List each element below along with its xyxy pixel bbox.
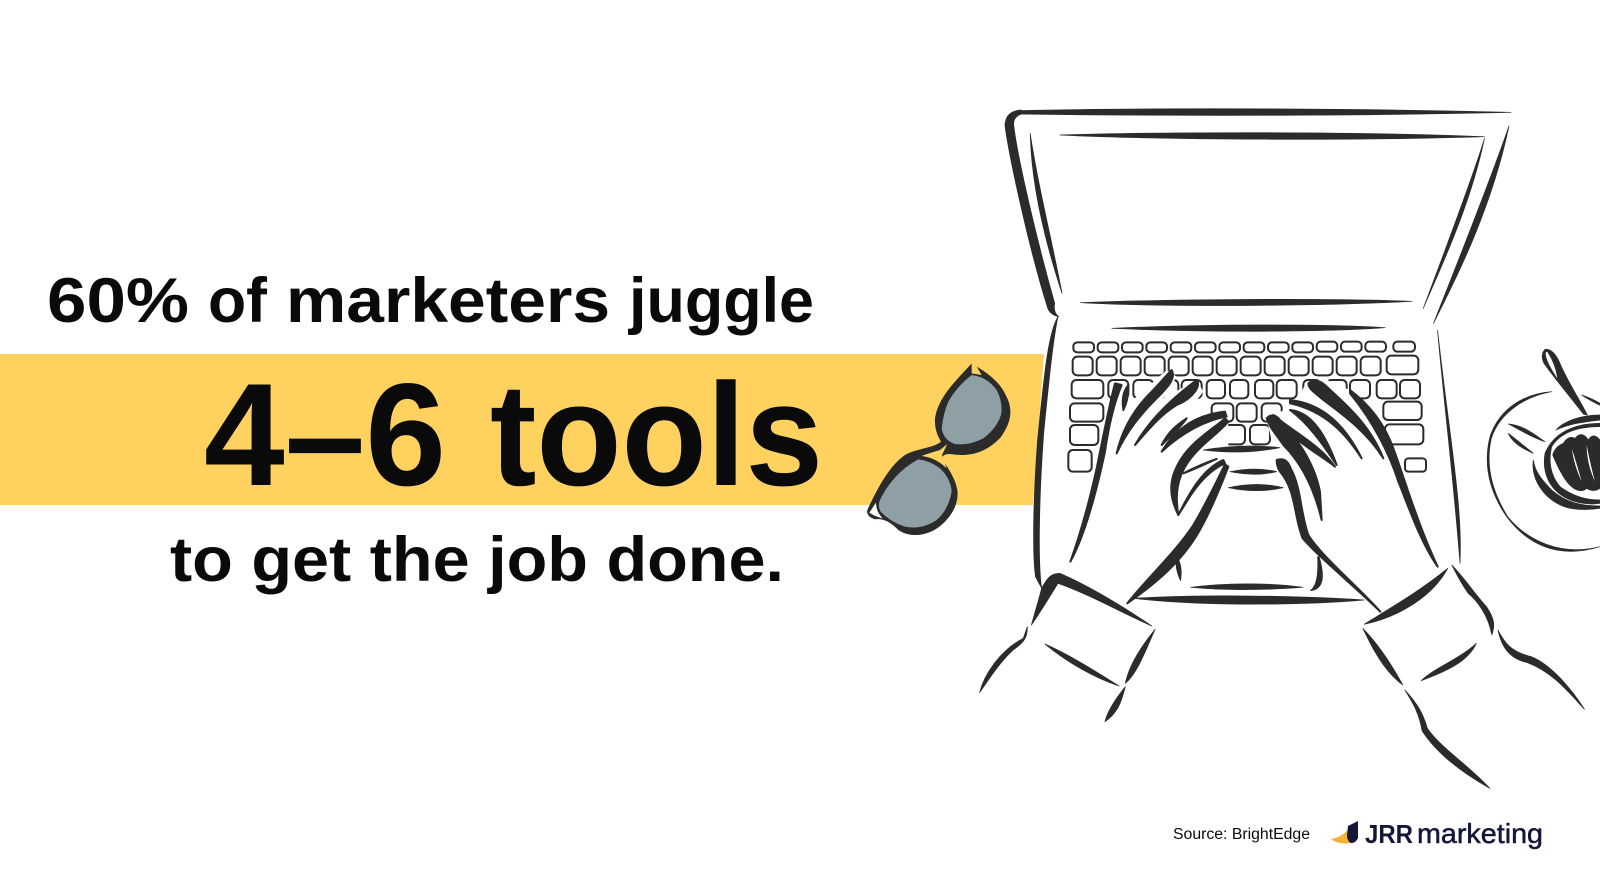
heading line 1 (47, 266, 814, 336)
big stat: 4-6 tools: tools (490, 353, 823, 516)
source note: Source: BrightEdge (1173, 826, 1310, 843)
right hand (1267, 381, 1438, 612)
logo: JRR marketing: marketing (1417, 818, 1543, 849)
heading line 1: of (208, 266, 268, 336)
logo wordmark: JRR (1365, 819, 1413, 849)
icon: sunglasses (867, 363, 1010, 535)
spacebar and palm rest strokes (1203, 446, 1283, 491)
logo: JRR marketing (1331, 818, 1543, 849)
laptop keyboard (1068, 342, 1426, 472)
big stat: 4-6 tools (204, 353, 823, 516)
logo mark (1331, 821, 1358, 844)
illustration: laptop and hands (980, 109, 1600, 788)
left hand (1070, 370, 1228, 603)
heading line 3: to get the job done. (170, 525, 784, 595)
sleeve cuffs (980, 565, 1584, 788)
heading line 1: marketers (286, 266, 610, 336)
laptop screen (1005, 109, 1511, 331)
yellow highlight band (0, 354, 1044, 505)
laptop base and trackpad (1034, 317, 1460, 604)
icon: coffee cup, saucer and spoon (1487, 349, 1600, 551)
big stat: 4-6 tools: 4–6 (204, 353, 446, 516)
heading line 1: juggle (628, 266, 814, 336)
heading line 1: 60% (47, 266, 189, 336)
hands white silhouette (1070, 370, 1438, 612)
